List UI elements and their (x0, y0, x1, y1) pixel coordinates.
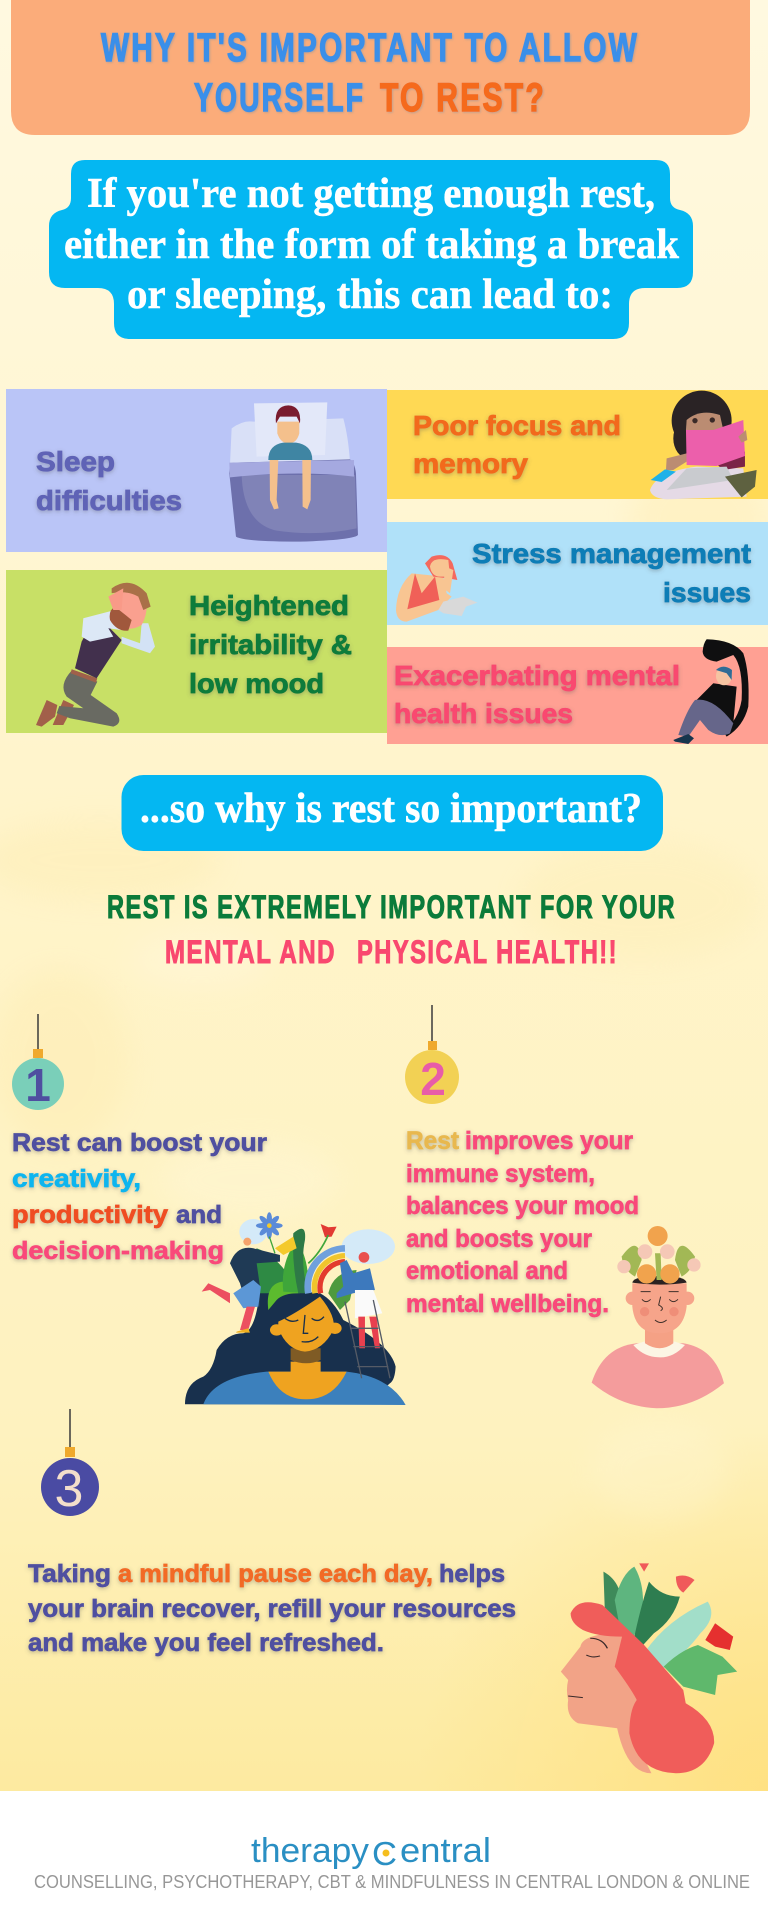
panel text: stress (472, 538, 751, 608)
panel: heightened irritability and low mood (6, 570, 387, 733)
text: point 3: and make you feel refreshed. (28, 1629, 384, 1657)
text: point 2: mental wellbeing. (406, 1290, 609, 1318)
panel text: poor focus (413, 410, 621, 479)
intro text: If you're not getting enough rest, (87, 171, 655, 217)
callout text: ...so why is rest so important? (140, 786, 642, 832)
text: point 3: helps (439, 1560, 505, 1588)
text: point 1: creativity, (12, 1165, 141, 1193)
text: point 2: balances your mood (406, 1192, 639, 1220)
panel text: stress: Stress management (472, 538, 751, 569)
icon: ornament number 1 (12, 1014, 64, 1111)
logo: therapy central: therapy (251, 1832, 369, 1870)
text: point 3: a mindful pause each day, (118, 1560, 433, 1588)
panel: stress management issues (387, 522, 768, 625)
icon: ornament number 3 (41, 1409, 99, 1518)
panel: sleep difficulties (6, 389, 387, 552)
icon: woman reading pink book (650, 391, 757, 499)
text: point 2: and boosts your (406, 1225, 592, 1253)
heading: rest is extremely important: PHYSICAL HEALTH!! (357, 934, 618, 970)
intro text (64, 171, 680, 318)
title text (101, 26, 639, 120)
panel text: irritability: Heightened (189, 590, 349, 621)
panel text: sleep difficulties: Sleep (36, 446, 115, 477)
text: point 1 (12, 1129, 267, 1265)
intro callout bubble (49, 160, 693, 339)
intro text: either in the form of taking a break (64, 222, 680, 268)
text: point 2: immune system, (406, 1160, 595, 1188)
panel text: irritability: irritability & (189, 629, 352, 660)
icon: smiling person with flowers in head (592, 1226, 724, 1408)
icon: person with black cat shadow (673, 639, 749, 744)
panel text: mental health: Exacerbating mental (394, 660, 680, 691)
panel text: irritability: low mood (189, 668, 324, 699)
text: point 3 (28, 1560, 516, 1657)
text: point 1: Rest can boost your (12, 1129, 267, 1157)
panel: exacerbating mental health issues (387, 639, 768, 744)
text: point 2: emotional and (406, 1257, 568, 1285)
callout: so why is rest so important (122, 775, 663, 851)
title text: TO REST? (380, 76, 546, 120)
icon: ornament number 2: 2 (420, 1053, 446, 1105)
panel text: poor focus: memory (413, 448, 528, 479)
text: point 1: productivity (12, 1201, 168, 1229)
text: point 3: Taking (28, 1560, 111, 1588)
icon: woman in profile with leaves (561, 1563, 737, 1773)
panel text: irritability (189, 590, 352, 699)
icon: stressed woman with paper (396, 555, 477, 622)
text: point 2: Rest (406, 1127, 460, 1155)
heading: rest is extremely important: MENTAL AND (165, 934, 336, 970)
logo: therapy central (251, 1832, 491, 1872)
footer band (0, 1791, 768, 1920)
title text: YOURSELF (194, 76, 365, 120)
text: point 2 (406, 1127, 639, 1318)
title banner (11, 0, 750, 135)
logo: therapy central: C (372, 1835, 397, 1872)
panel text: poor focus: Poor focus and (413, 410, 621, 441)
heading: rest is extremely important (107, 889, 676, 970)
panel text: mental health: health issues (394, 698, 573, 729)
text: point 1: decision-making (12, 1237, 224, 1265)
panel: poor focus and memory (387, 390, 768, 499)
text: point 2: improves your (465, 1127, 633, 1155)
icon: ornament number 1: 1 (25, 1059, 51, 1111)
icon: man awake in bed (229, 402, 358, 542)
icon: ornament number 3: 3 (55, 1460, 83, 1518)
logo: therapy central: entral (400, 1832, 491, 1870)
text: point 1: and (176, 1201, 222, 1229)
icon: ornament number 2 (405, 1005, 459, 1105)
intro text: or sleeping, this can lead to: (127, 272, 613, 318)
panel text: mental health (394, 660, 680, 729)
text: point 3: your brain recover, refill your resources (28, 1595, 516, 1623)
panel text: sleep difficulties: difficulties (36, 485, 182, 516)
panel text: stress: issues (663, 577, 751, 608)
panel text: sleep difficulties (36, 446, 182, 516)
icon: kneeling man holding head (36, 583, 155, 727)
icon: woman with garden growing from head (185, 1212, 406, 1405)
